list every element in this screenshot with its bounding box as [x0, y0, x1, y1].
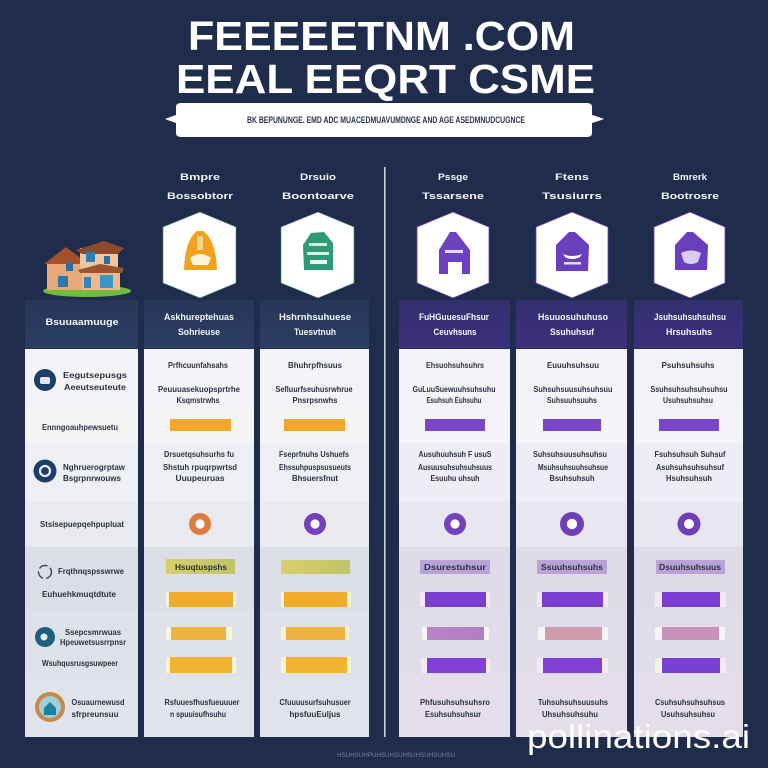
cell text: column 1 bottom: n spuuisufhsuhu [170, 710, 226, 719]
cell text: column 2 middle [279, 450, 351, 483]
cell text: column 5 bottom: Usuhsuhsuhsu [661, 710, 715, 719]
cell text: column 3 bottom [420, 698, 490, 719]
bar: purple [543, 419, 601, 431]
icon: outline circle [38, 566, 52, 578]
header text: row labels: Bsuuaamuuge [46, 317, 118, 327]
row bands: column 3 [399, 349, 510, 737]
cell text: column 1 top: Prfhcuunfahsahs [168, 361, 229, 370]
icon: purple ring [444, 513, 466, 535]
cell text: column 3 middle: Ausuusuhsuhsuhsuus [418, 463, 492, 472]
icon: purple ring [678, 512, 700, 536]
header: column 3 [399, 300, 510, 348]
subtitle banner: BK BEPUNUNGE. EMD ADC MUACEDMUAVUMDNGE AND AGE ASEDMNUDCUGNCE [247, 115, 525, 125]
icon: colourful circle [35, 692, 65, 722]
pill: lavender label: Dsuuhsuhsuus [659, 563, 722, 572]
cell text: column 1 top: Ksqmstrwhs [176, 396, 220, 405]
cell text: column 5 middle: Asuhsuhsuhsuhsuf [656, 463, 724, 472]
icon: teal circle [35, 627, 55, 647]
cell text: column 5 top: Ssuhsuhsuhsuhsuhsu [650, 385, 728, 394]
cell text: column 2 top: Sefluurfseuhusrwhrue [276, 385, 353, 394]
column 4 heading [542, 172, 602, 202]
label: row 7 [72, 698, 125, 719]
label: row 7: Osuaurnewusd [72, 698, 125, 707]
icon: orange badge [163, 212, 236, 298]
cell text: column 4 middle [533, 450, 608, 483]
pill: purple 1 [537, 592, 608, 607]
title: EEAL EEQRT CSME [176, 56, 595, 102]
column 3 heading [422, 172, 484, 202]
header text: column 1: Sohrieuse [178, 327, 220, 337]
label: row 2: Ennngoauhpewsuetu [42, 423, 118, 432]
label: row 4: Stsisepuepqehpupluat [40, 520, 124, 529]
row bands: column 5 [634, 349, 743, 737]
cell text: column 3 top: Ehsuohsuhsuhrs [426, 361, 484, 370]
cell text: column 4 top [534, 361, 613, 405]
header text: column 4 [538, 312, 608, 337]
icon: navy circle [34, 369, 56, 391]
pill: lime [281, 560, 350, 574]
header text: column 3: FuHGuuesuFhsur [419, 312, 489, 322]
cell text: column 2 top [276, 361, 353, 405]
column 3 heading: Tssarsene [422, 191, 484, 202]
column 2 heading [282, 172, 354, 202]
pill: lavender label: Ssuuhsuhsuhs [541, 563, 604, 572]
panel: row labels column [25, 300, 138, 737]
pill: purple 2 [537, 658, 608, 673]
pill: orange 1 [281, 592, 351, 607]
cell text: column 2 top: Bhuhrpfhsuus [288, 361, 343, 370]
column 4 heading: Ftens [555, 172, 589, 183]
panel: column 3 [399, 300, 510, 737]
header: column 1 [144, 300, 254, 348]
cell text: column 4 top: Suhsuuhsuuhs [547, 396, 597, 405]
cell text: column 5 bottom: Csuhsuhsuhsuhsus [655, 698, 726, 707]
cell text: column 2 bottom: Cfuuuusurfsuhusuer [280, 698, 350, 707]
cell text: column 5 top [650, 361, 728, 405]
pill: purple 1 [655, 592, 726, 607]
column 1 heading: Bmpre [180, 172, 220, 183]
label: row 5 [42, 567, 125, 599]
row bands: column 1 [144, 349, 254, 737]
cell text: column 5 top: Psuhsuhsuhs [662, 361, 715, 370]
header: column 4 [516, 300, 627, 348]
header: column 5 [634, 300, 743, 348]
column 1 heading: Bossobtorr [167, 191, 233, 202]
cell text: column 5 middle [654, 450, 726, 483]
label: row 1 [63, 371, 128, 392]
pill: purple 1 [420, 592, 490, 607]
pill: orange 2 [166, 627, 232, 640]
row bands: column 4 [516, 349, 627, 737]
bar: orange [284, 419, 345, 431]
cell text: column 2 bottom: hpsfuuEuljus [290, 710, 341, 719]
label: row 5: Euhuehkmuqtdtute [42, 590, 117, 599]
panel: column 1 [144, 300, 254, 737]
cell text: column 4 top: Suhsuhsuusuhsuhsuu [534, 385, 613, 394]
label: row 3: Nghruerogrptaw [63, 463, 126, 472]
pill: tan-pink [538, 627, 608, 640]
watermark: pollinations.ai [527, 718, 750, 755]
label: row 1: Aeeutseuteute [64, 383, 127, 392]
cell text: column 4 middle: Suhsuhsuusuhsuhsu [533, 450, 607, 459]
label: row 6: Ssepcsmrwuas [65, 628, 122, 637]
cell text: column 4 middle: Bsuhsuhsuh [550, 474, 595, 483]
pill: lavender label [537, 560, 607, 574]
cell text: column 4 top: Euuuhsuhsuu [547, 361, 599, 370]
pill: lavender label: Dsurestuhsur [424, 563, 486, 572]
label: row 7: sfrpreunsuu [72, 710, 119, 719]
cell text: column 1 middle: Drsuetqsuhsurhs fu [164, 450, 234, 459]
icon: purple badge 1 [417, 212, 489, 298]
header text: column 3: Ceuvhsuns [434, 327, 476, 337]
subtitle banner [165, 103, 604, 137]
header text: column 2 [279, 312, 351, 337]
cell text: column 3 top [412, 361, 496, 405]
icon: purple badge 3 [654, 212, 725, 298]
header text: column 1: Askhureptehuas [164, 312, 234, 322]
header: column 2 [260, 300, 369, 348]
column 5 heading: Bmrerk [673, 172, 708, 183]
label: row 3: Bsgrpnrwouws [63, 474, 122, 483]
pill: lavender label [420, 560, 490, 574]
cell text: column 1 top: Peuuuasekuopsprtrhe [158, 385, 241, 394]
header text: column 1 [164, 312, 234, 337]
header text: column 4: Hsuuosuhuhuso [538, 312, 608, 322]
cell text: column 3 middle [418, 450, 492, 483]
header text: column 4: Ssuhuhsuf [550, 327, 595, 337]
pill: purple 2 [655, 658, 726, 673]
pill: lime: Hsuqtuspshs [175, 563, 228, 572]
column 2 heading: Boontoarve [282, 191, 354, 202]
header text: column 5: Jsuhsuhsuhsuhsu [654, 312, 726, 322]
panel: column 4 [516, 300, 627, 737]
pill: lavender label [656, 560, 725, 574]
cell text: column 1 middle: Shstuh rpuqrpwrtsd [163, 463, 237, 472]
label: row 6: Hpeuwetsusrrpnsr [60, 638, 126, 647]
header text: column 5 [654, 312, 726, 337]
cell text: column 2 middle: Fseprfnuhs Ushuefs [279, 450, 349, 459]
bar: purple [425, 419, 485, 431]
center divider [384, 167, 386, 737]
cell text: column 3 top: GuLuuSuewuuhsuhsuhu [412, 385, 496, 394]
title [176, 13, 595, 102]
icon: purple ring [304, 513, 326, 535]
header text: column 5: Hrsuhsuhs [666, 327, 712, 337]
cell text: column 2 top: Pnsrpsnwhs [292, 396, 338, 405]
cell text: column 5 middle: Fsuhsuhsuh Suhsuf [654, 450, 726, 459]
label: row 5: Frqthnqspsswrwe [58, 567, 125, 576]
cell text: column 1 middle [163, 450, 237, 483]
label: row 6 [42, 628, 126, 668]
cell text: column 5 bottom [655, 698, 726, 719]
pill: tan-pink [655, 627, 725, 640]
pill: orange 3 [281, 657, 351, 673]
cell text: column 5 middle: Hsuhsuhsuh [666, 474, 712, 483]
panel: column 5 [634, 300, 743, 737]
cell text: column 2 middle: Ehssuhpuspsusueuts [279, 463, 351, 472]
header text: column 2: Hshrnhsuhuese [279, 312, 351, 322]
column 5 heading: Bootrosre [661, 191, 719, 202]
pill: orange 3 [166, 657, 236, 673]
cell text: column 4 bottom [538, 698, 609, 719]
icon: navy ring [34, 460, 56, 482]
cell text: column 1 bottom [164, 698, 240, 719]
column 3 heading: Pssge [438, 172, 468, 183]
icon: purple ring [560, 512, 584, 536]
icon: purple badge 2 [536, 212, 608, 298]
pill: pink 1 [422, 627, 489, 640]
bar: orange [170, 419, 231, 431]
footer note: HSUHSUHPUHSUHSUHSUHSUHSUHSU [337, 752, 455, 759]
pill: purple 2 [421, 658, 490, 673]
cell text: column 3 bottom: Phfusuhsuhsuhsro [420, 698, 490, 707]
cell text: column 3 middle: Esuuhu uhsuh [430, 474, 480, 483]
icon: green badge [281, 212, 354, 298]
icon: orange ring [189, 513, 211, 535]
cell text: column 1 bottom: Rsfuuesfhusfueuuuer [164, 698, 240, 707]
cell text: column 4 bottom: Tuhsuhsuhsuusuhs [538, 698, 609, 707]
cell text: column 4 bottom: Uhsuhsuhsuhu [542, 710, 598, 719]
icon: houses illustration [43, 241, 131, 297]
pill: lime [166, 559, 235, 574]
label: row 1: Eegutsepusgs [63, 371, 128, 380]
row bands: column 2 [260, 349, 369, 737]
column 1 heading [167, 172, 233, 202]
column 2 heading: Drsuio [300, 172, 336, 183]
pill: orange 1 [166, 592, 236, 607]
cell text: column 3 top: Esuhsuh Euhsuhu [426, 396, 482, 405]
column 4 heading: Tsusiurrs [542, 191, 602, 202]
cell text: column 3 bottom: Esuhsuhsuhsur [425, 710, 481, 719]
row bands: row labels [25, 349, 138, 737]
cell text: column 2 bottom [280, 698, 350, 719]
cell text: column 5 top: Usuhsuhsuhsu [663, 396, 713, 405]
header: row labels [25, 300, 138, 348]
cell text: column 4 middle: Msuhsuhsuuhsuhsue [538, 463, 608, 472]
cell text: column 1 top [158, 361, 241, 405]
bar: purple [659, 419, 719, 431]
cell text: column 2 middle: Bhsuersfnut [292, 474, 338, 483]
cell text: column 1 middle: Uuupeuruas [176, 474, 225, 483]
cell text: column 3 middle: Ausuhuuhsuh F usuS [418, 450, 492, 459]
pill: orange 2 [281, 627, 349, 640]
header text: column 3 [419, 312, 489, 337]
header text: column 2: Tuesvtnuh [294, 327, 336, 337]
title: FEEEEETNM .COM [188, 13, 575, 59]
label: row 3 [63, 463, 126, 483]
column 5 heading [661, 172, 719, 202]
panel: column 2 [260, 300, 369, 737]
label: row 6: Wsuhqusrusgsuwpeer [42, 659, 118, 668]
